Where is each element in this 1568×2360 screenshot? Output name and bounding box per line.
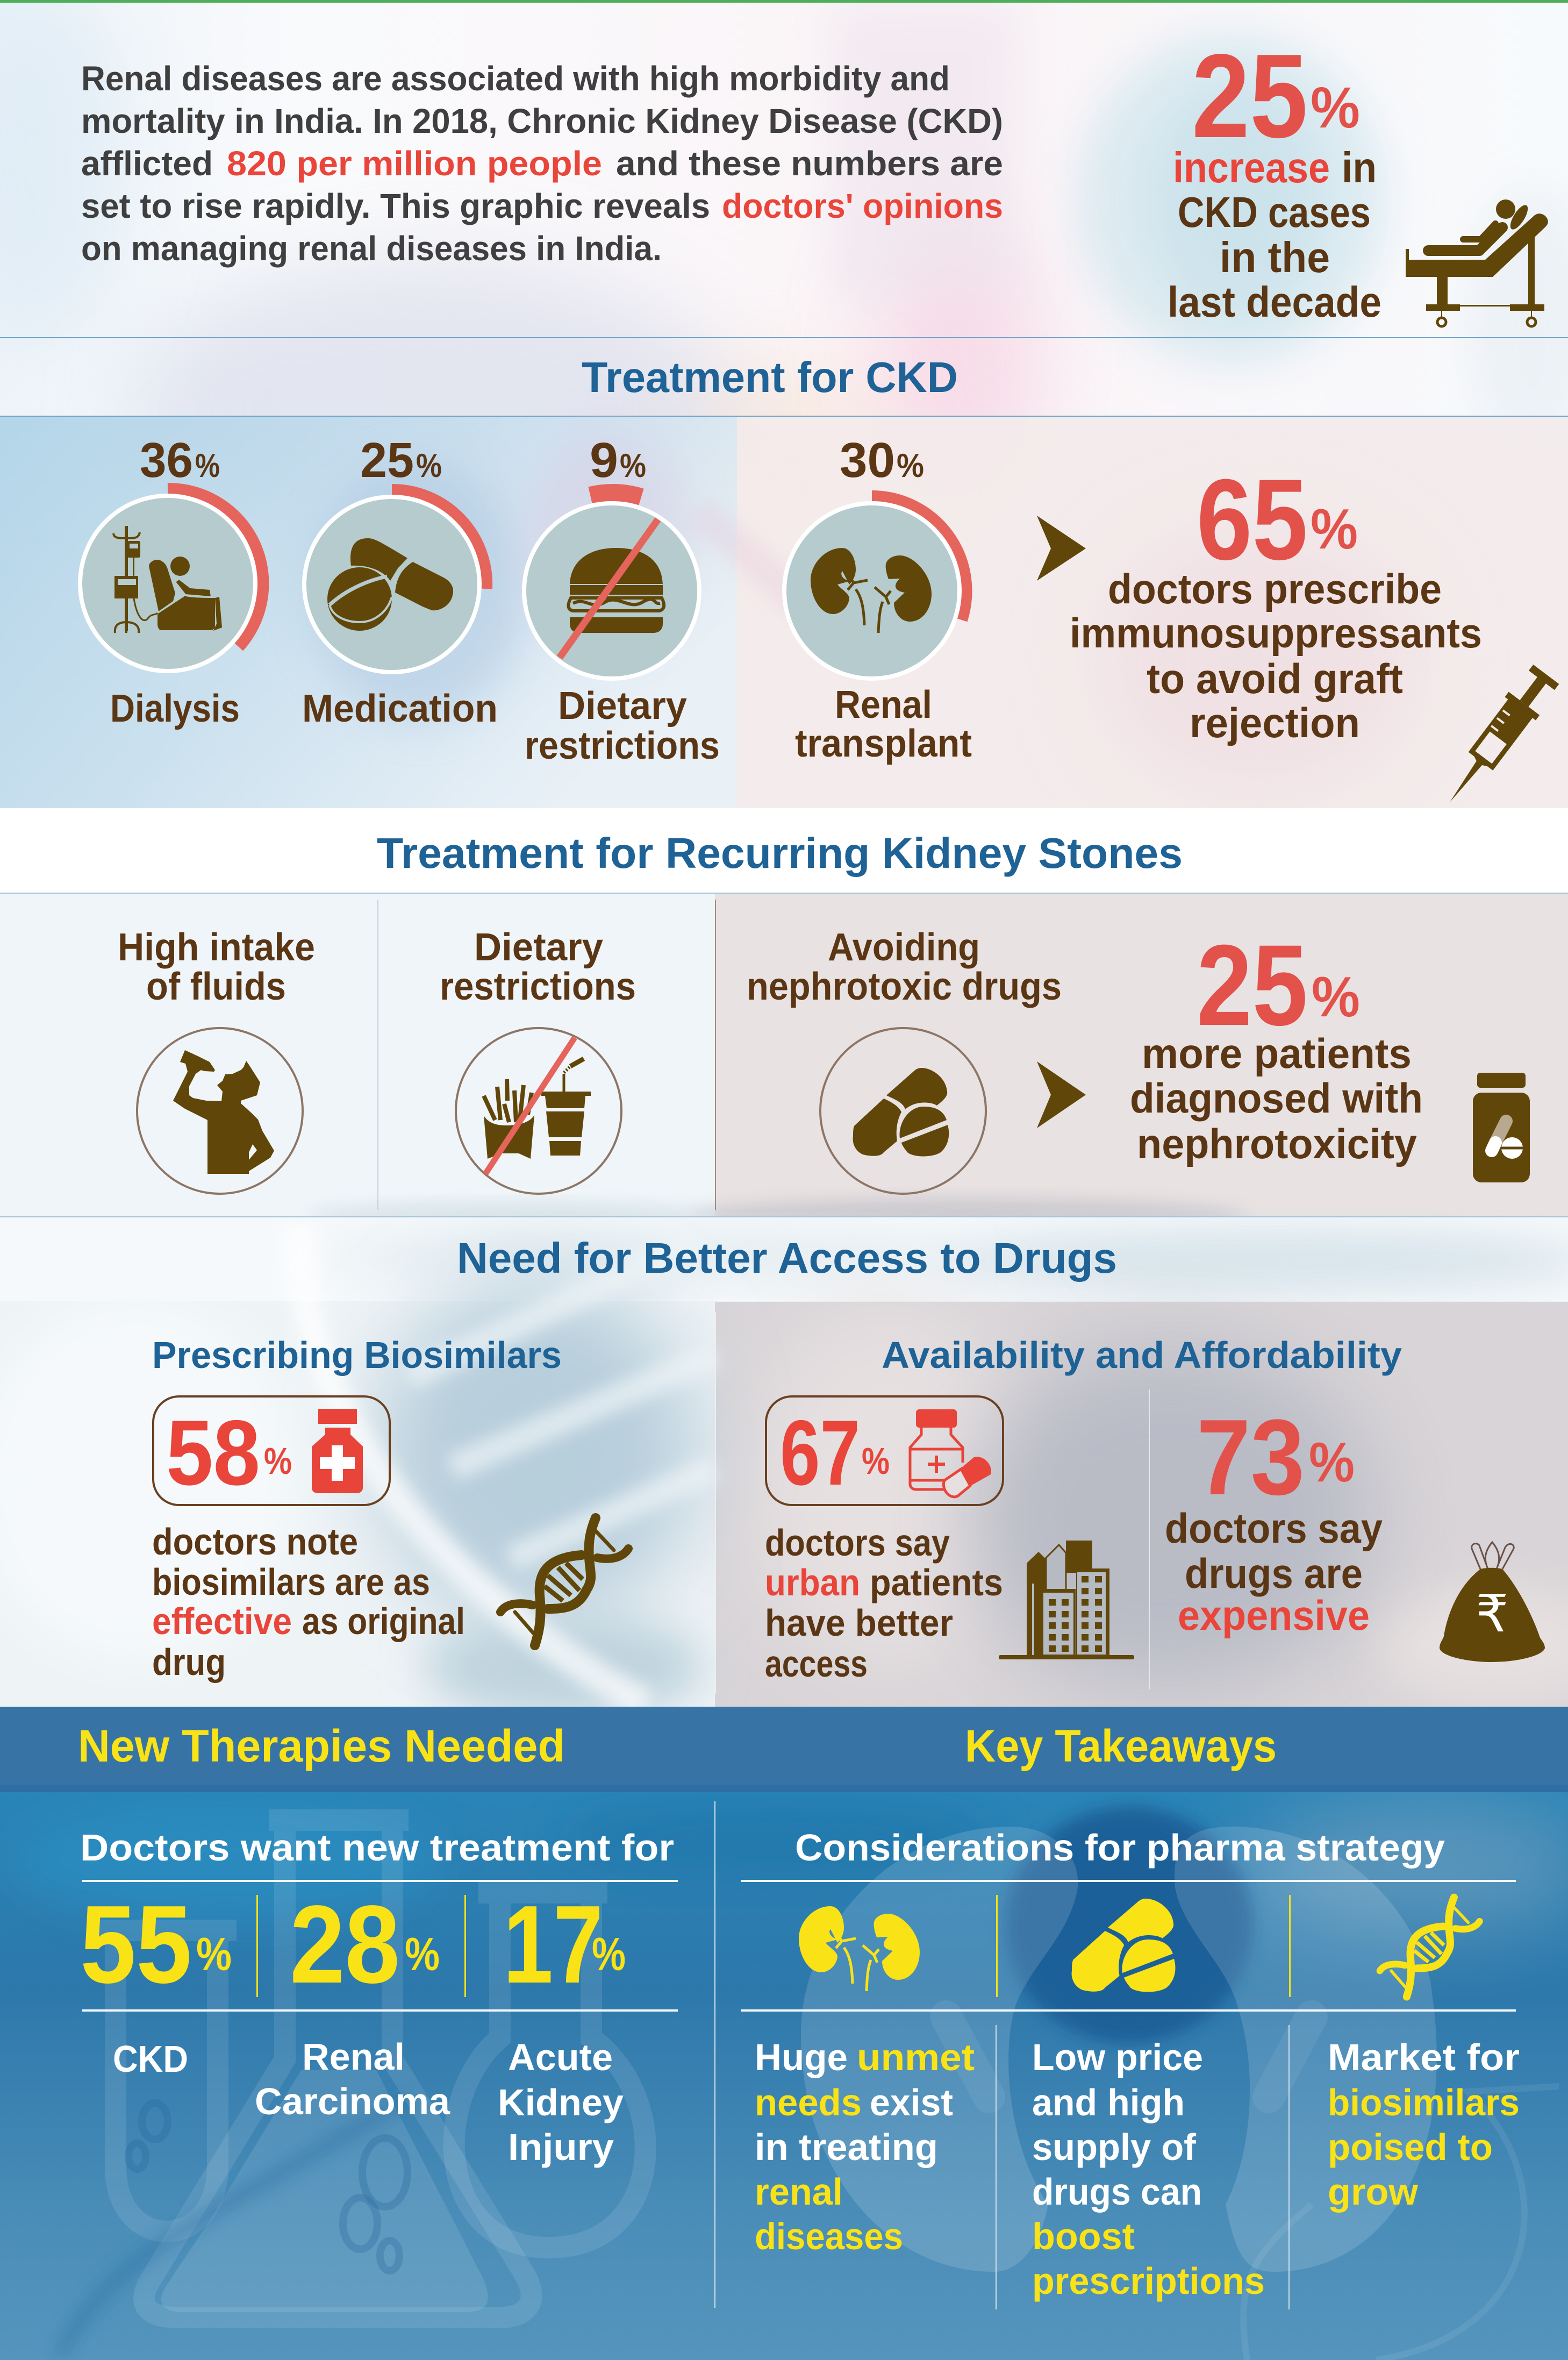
callout: 25% increase in CKD cases: in [1342, 144, 1377, 191]
heading: New Therapies Needed: New Therapies Needed [78, 1721, 565, 1771]
chart: Dietary restrictions 9%: 9 [590, 433, 618, 488]
chart: Dialysis 36%: 36 [140, 433, 193, 488]
text: market for biosimilars: poised to [1328, 2126, 1493, 2168]
stat: 73% doctors say drugs are expensive [1165, 1398, 1383, 1639]
callout: 25% increase in CKD cases: 25 [1192, 30, 1308, 163]
text: low price: prescriptions [1032, 2260, 1265, 2302]
stat: 55% CKD: 55 [80, 1883, 192, 2006]
stat: 28% Renal Carcinoma [255, 1883, 450, 2122]
panel: intro text: Renal diseases are associated with high morbidity and [81, 59, 950, 98]
text: low price: supply of [1032, 2126, 1197, 2168]
icon: man drinking [173, 1050, 274, 1174]
chart: Dialysis 36%: % [195, 447, 220, 484]
labels: CKD treatments: Dialysis [110, 687, 240, 730]
stat: 55% CKD: % [196, 1929, 232, 1980]
panel: Dietary restrictions: Dietary [474, 926, 603, 969]
subheading: Availability and Affordability: Availability and Affordability [882, 1334, 1402, 1376]
chart: Renal transplant 30%: % [897, 447, 924, 484]
stat: 73% doctors say drugs are expensive: 73 [1197, 1398, 1305, 1517]
text: market for biosimilars: biosimilars [1328, 2081, 1520, 2123]
divider rules for bottom section [82, 1801, 1516, 2309]
panel: High intake of fluids: High intake [118, 926, 315, 969]
callout: 25% increase in CKD cases [1168, 30, 1381, 326]
icon: medicine bottle [1473, 1073, 1530, 1182]
panel: blue headings band [0, 1707, 1568, 1792]
icon: burger crossed out [560, 519, 664, 658]
text: low price: and high [1032, 2081, 1185, 2123]
callout: 25% increase in CKD cases: last decade [1168, 278, 1381, 326]
callout: 25% more patients diagnosed with nephrotoxicity: more patients [1142, 1030, 1412, 1077]
text: doctors note biosimilars: drug [152, 1641, 226, 1683]
decorative flasks [94, 1820, 646, 2318]
text: market for biosimilars [1328, 2036, 1520, 2213]
stat: 55% CKD [80, 1883, 232, 2080]
arrow: transplant to immunosuppressants [1037, 516, 1086, 581]
stat box: 58%: 58 [166, 1401, 260, 1505]
top green rule [0, 0, 1568, 3]
callout: 25% more patients diagnosed with nephrotoxicity: diagnosed with [1130, 1074, 1423, 1122]
text: unmet needs: needs [755, 2081, 862, 2123]
icon: yellow kidneys [799, 1906, 920, 1991]
text: unmet needs: in treating [755, 2126, 938, 2168]
chart: Medication 25%: % [416, 447, 442, 484]
callout: 65% doctors prescribe immunosuppressants [1070, 455, 1482, 746]
icon: syringe [1434, 662, 1562, 814]
icon: yellow pills [1072, 1899, 1175, 1992]
icon: kidneys [811, 548, 932, 633]
icon: patient in hospital bed [1406, 199, 1548, 326]
text: market for biosimilars: Market for [1328, 2036, 1520, 2078]
callout: 65% doctors prescribe immunosuppressants: 65 [1197, 455, 1308, 584]
stat: 28% Renal Carcinoma: % [405, 1929, 440, 1980]
text: doctors note biosimilars [152, 1521, 465, 1683]
stat: 28% Renal Carcinoma: Renal [302, 2036, 405, 2078]
text: unmet needs: Huge [755, 2036, 848, 2078]
text: low price [1032, 2036, 1265, 2302]
panel: Availability and Affordability [765, 1334, 1545, 1685]
heading: Need for Better Access to Drugs: Need for Better Access to Drugs [457, 1234, 1117, 1282]
callout: 65% doctors prescribe immunosuppressants: % [1311, 497, 1358, 561]
icon: pills [853, 1068, 949, 1156]
callout: 25% increase in CKD cases: % [1311, 75, 1360, 140]
labels: CKD treatments: Renal [835, 683, 932, 726]
panel: intro text: 820 per million people [227, 144, 602, 183]
callout: 25% increase in CKD cases: in the [1220, 233, 1330, 281]
stat: 17% Acute Kidney Injury: Kidney [498, 2081, 624, 2123]
stat: 73% doctors say drugs are expensive: doctors say [1165, 1505, 1383, 1552]
icon: fries and drink crossed out [484, 1038, 591, 1174]
stat box: 58%: % [264, 1440, 292, 1482]
background: DNA artwork for middle section [0, 893, 1568, 1721]
labels: CKD treatments [110, 683, 972, 767]
stat: 17% Acute Kidney Injury: Acute [508, 2036, 613, 2078]
subheading: Doctors want new treatment for: Doctors want new treatment for [80, 1827, 674, 1869]
chart: Dietary restrictions 9%: % [620, 447, 646, 484]
chart: Renal transplant 30% [784, 433, 966, 679]
stat: 28% Renal Carcinoma: Carcinoma [255, 2080, 450, 2122]
panel: High intake of fluids [118, 926, 315, 1194]
icon: rupee money bag [1440, 1542, 1545, 1662]
callout: 25% increase in CKD cases: CKD cases [1178, 188, 1371, 236]
panel: Dietary restrictions: restrictions [440, 965, 636, 1008]
stat: 17% Acute Kidney Injury [498, 1883, 626, 2168]
stat box: 67%: % [862, 1440, 890, 1482]
stat box: 67% [766, 1396, 1003, 1505]
text: doctors note biosimilars: effective [152, 1600, 292, 1642]
panel: intro text: and these numbers are [616, 144, 1003, 183]
white band: stones heading [0, 808, 1568, 893]
text: doctors note biosimilars: doctors note [152, 1521, 358, 1563]
callout: 65% doctors prescribe immunosuppressants: to avoid graft [1147, 655, 1403, 702]
text: unmet needs: renal [755, 2171, 843, 2213]
panel: Prescribing Biosimilars [152, 1334, 628, 1683]
subheading: Considerations for pharma strategy: Considerations for pharma strategy [795, 1827, 1445, 1869]
text: low price: Low price [1032, 2036, 1203, 2078]
arrow: nephrotoxic drugs to nephrotoxicity [1037, 1061, 1086, 1128]
panel: bottom blue section background [0, 1792, 1568, 2360]
icon: pills [327, 538, 453, 631]
stat box: 58% [153, 1396, 390, 1505]
stat: 73% doctors say drugs are expensive: drugs are [1185, 1550, 1363, 1597]
panel: Avoiding nephrotoxic drugs: Avoiding [828, 926, 980, 969]
callout: 65% doctors prescribe immunosuppressants: doctors prescribe [1108, 565, 1442, 612]
text: unmet needs: exist [870, 2081, 953, 2123]
callout: 65% doctors prescribe immunosuppressants: rejection [1190, 699, 1360, 746]
labels: CKD treatments: transplant [795, 722, 972, 765]
text: market for biosimilars: grow [1328, 2171, 1419, 2213]
text: urban patients have better access: patients [870, 1562, 1003, 1603]
panel: intro text: doctors' opinions [722, 187, 1003, 225]
chart: Renal transplant 30%: 30 [840, 433, 895, 488]
icon: rupee money bag: ₹ [1476, 1584, 1509, 1644]
divider rules for stones panel [0, 893, 1568, 1217]
icon: yellow DNA [1380, 1898, 1480, 1997]
panel: CKD treatments background [0, 417, 1568, 808]
text: doctors note biosimilars: as original [302, 1600, 465, 1642]
icon: city buildings [999, 1541, 1134, 1659]
panel: intro text [81, 59, 1003, 268]
text: urban patients have better access: access [765, 1643, 868, 1685]
panel: Avoiding nephrotoxic drugs: nephrotoxic drugs [747, 965, 1062, 1008]
text: unmet needs: unmet [857, 2036, 975, 2078]
chart: Dietary restrictions 9% [524, 433, 699, 679]
stat: 73% doctors say drugs are expensive: % [1309, 1431, 1355, 1494]
heading: Key Takeaways: Key Takeaways [965, 1721, 1277, 1771]
text: doctors note biosimilars: biosimilars are as [152, 1561, 430, 1603]
panel: intro text: afflicted [81, 144, 213, 183]
divider rules for access panel [715, 1312, 1150, 1694]
callout: 25% more patients diagnosed with nephrotoxicity [1130, 921, 1423, 1167]
divider rules for header band [0, 337, 1568, 417]
callout: 25% more patients diagnosed with nephrotoxicity: % [1312, 965, 1360, 1029]
icon: bottle and capsule [910, 1409, 991, 1497]
icon: red medicine bottle [312, 1409, 363, 1493]
text: low price: drugs can [1032, 2171, 1202, 2213]
stat: 73% doctors say drugs are expensive: expensive [1178, 1592, 1370, 1639]
labels: CKD treatments: Medication [302, 687, 498, 730]
stat: 17% Acute Kidney Injury: 17 [503, 1883, 603, 2006]
icon: DNA helix [500, 1518, 628, 1645]
panel: Key Takeaways [755, 1827, 1520, 2302]
chart: Dialysis 36% [80, 433, 263, 671]
stat box: 67%: 67 [780, 1401, 860, 1505]
callout: 25% more patients diagnosed with nephrotoxicity: nephrotoxicity [1137, 1120, 1417, 1167]
heading: Treatment for Recurring Kidney Stones: Treatment for Recurring Kidney Stones [377, 829, 1183, 877]
panel: intro text: mortality in India. In 2018, Chronic Kidney Disease (CKD) [81, 102, 1003, 140]
text: urban patients have better access: urban [765, 1562, 860, 1603]
background: top kidney artwork [0, 0, 1568, 808]
text: low price: boost [1032, 2215, 1135, 2257]
callout: 65% doctors prescribe immunosuppressants: immunosuppressants [1070, 609, 1482, 657]
heading: Treatment for CKD: Treatment for CKD [582, 353, 958, 401]
callout: 25% more patients diagnosed with nephrotoxicity: 25 [1197, 921, 1308, 1050]
panel: High intake of fluids: of fluids [146, 965, 286, 1008]
labels: CKD treatments: Dietary [558, 685, 687, 728]
text: unmet needs [755, 2036, 975, 2257]
panel: Dietary restrictions [440, 926, 636, 1194]
subheading: Prescribing Biosimilars: Prescribing Biosimilars [152, 1334, 562, 1376]
text: urban patients have better access: doctors say [765, 1522, 950, 1564]
icon: dialysis chair [113, 526, 222, 633]
text: urban patients have better access [765, 1522, 1003, 1685]
chart: Medication 25% [304, 433, 486, 672]
text: urban patients have better access: have better [765, 1602, 953, 1644]
panel: Avoiding nephrotoxic drugs [747, 926, 1062, 1194]
panel: intro text: set to rise rapidly. This graphic reveals [81, 187, 710, 225]
panel: New Therapies [80, 1827, 674, 2168]
callout: 25% increase in CKD cases: increase [1173, 144, 1330, 191]
chart: Medication 25%: 25 [360, 433, 414, 488]
stat: 17% Acute Kidney Injury: Injury [508, 2126, 614, 2168]
text: unmet needs: diseases [755, 2215, 903, 2257]
stat: 17% Acute Kidney Injury: % [592, 1929, 626, 1980]
panel: intro text: on managing renal diseases in India. [81, 229, 662, 268]
labels: CKD treatments: restrictions [525, 724, 720, 767]
stat: 55% CKD: CKD [113, 2038, 188, 2080]
stat: 28% Renal Carcinoma: 28 [290, 1883, 400, 2006]
